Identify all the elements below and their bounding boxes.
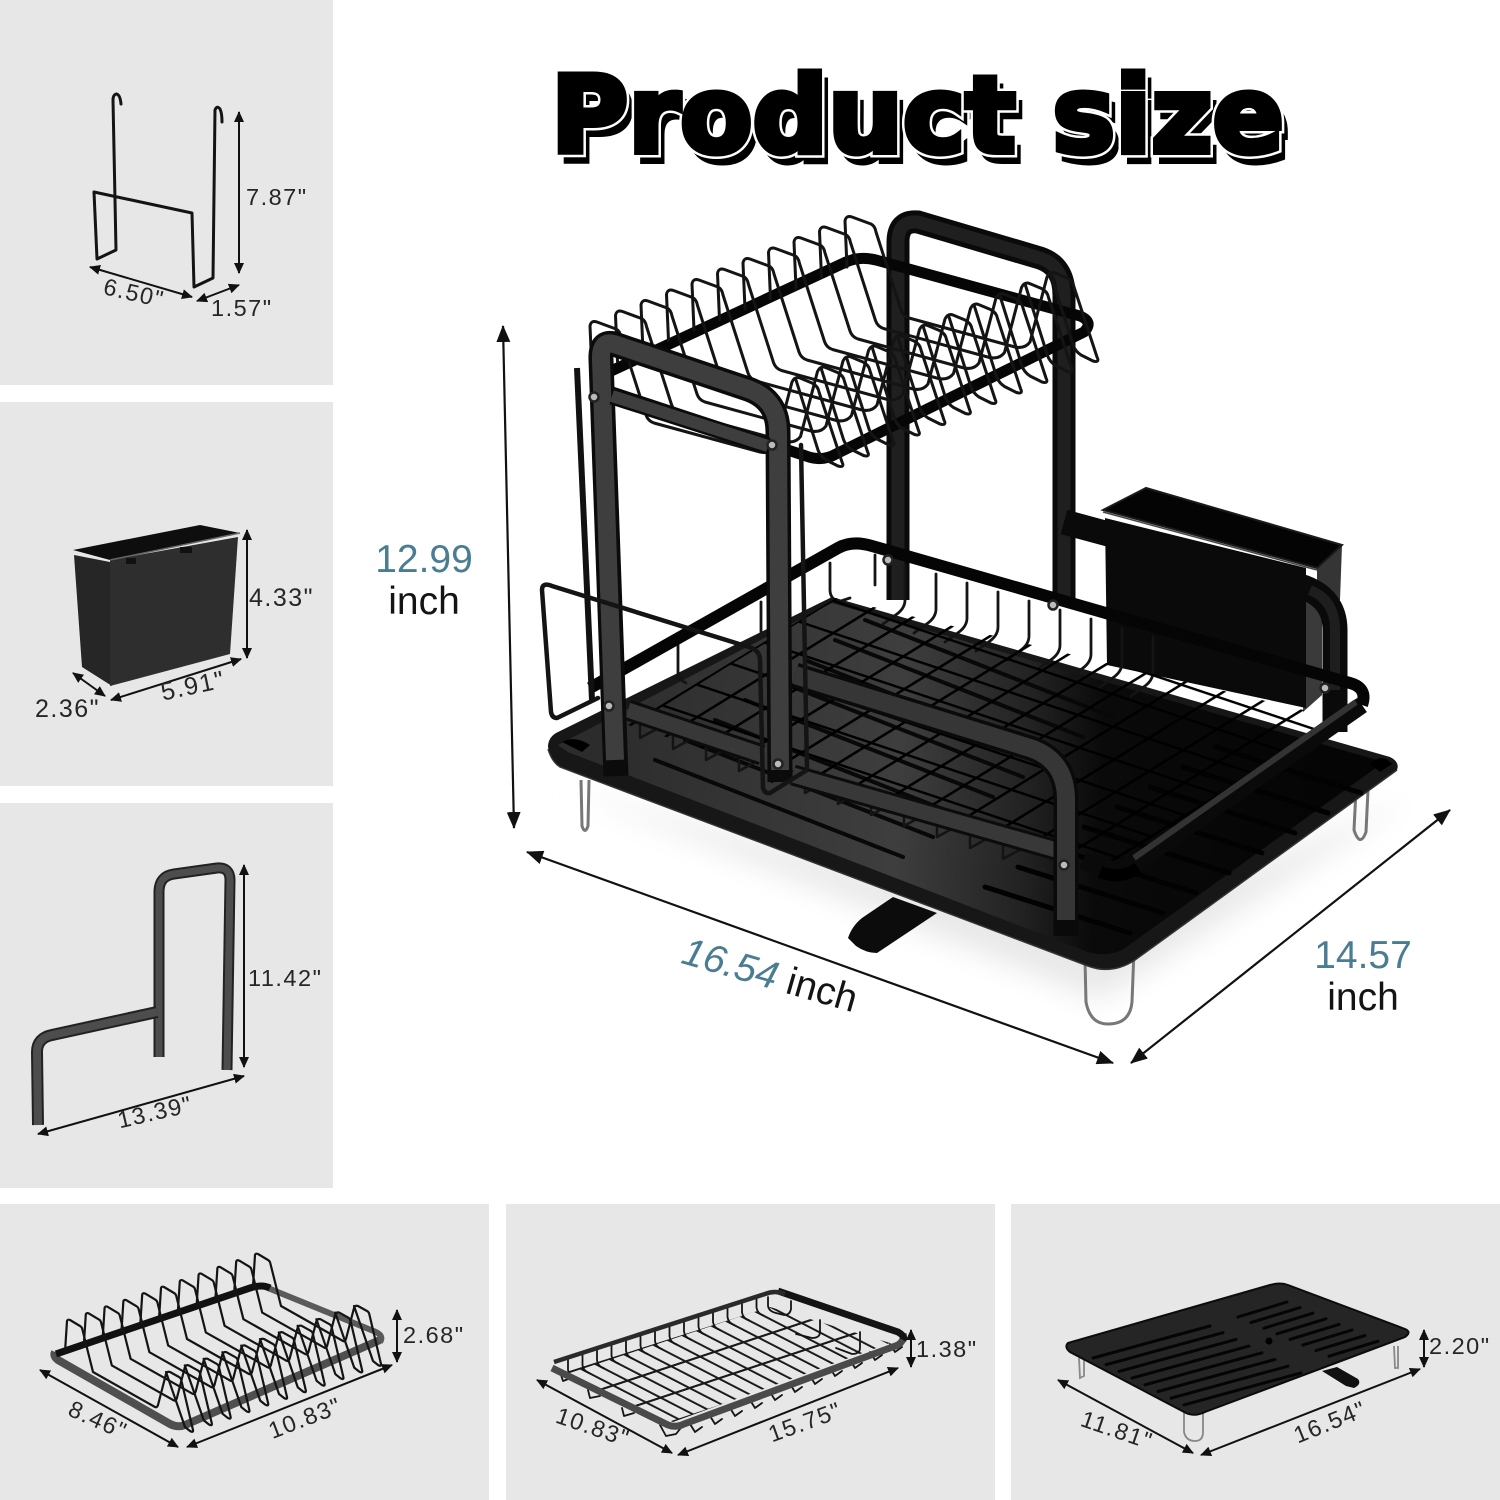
main product: two-tier dish rack [542,216,1410,1024]
label 10.83: 10.83" [265,1392,345,1444]
lower rack hanging wires [640,724,1023,859]
panel: lower wire rack part [506,1204,995,1500]
panel: wire holder part [0,0,333,385]
height label 12.99 inch: 12.99 [375,538,473,581]
panel: drip tray part [1011,1204,1500,1500]
panel: side frame part [0,803,333,1188]
label 4.33: 4.33" [249,584,314,612]
arrow 10.83 [187,1365,392,1447]
height arrow 11.42 [243,865,245,1067]
width label 14.57 inch: 14.57 [1314,934,1412,977]
height label 12.99 inch: inch [388,580,460,623]
arrow 15.75 [678,1368,898,1455]
floor shadow [570,790,1410,1000]
height arrow [503,326,514,828]
height label 12.99 inch [375,538,473,623]
label 13.39: 13.39" [115,1091,195,1133]
upper rack dividers [65,1254,381,1432]
stainless legs [581,780,1368,1024]
title: Product size [557,63,1290,186]
width arrow 5.91 [111,659,241,700]
drip tray [548,597,1398,969]
tray body [1066,1284,1408,1415]
title: Product size [551,54,1284,177]
lower rack frame [590,543,1364,875]
side frame drawing [37,868,230,1125]
label 1.57: 1.57" [211,295,273,321]
height arrow 4.33 [246,530,248,658]
drip tray spout [848,897,937,953]
depth arrow 1.57 [197,285,239,301]
label 2.68: 2.68" [403,1322,465,1348]
panel: utensil bin part [0,402,333,786]
height arrow 2.68 [396,1310,398,1362]
label 5.91: 5.91" [158,666,228,706]
height arrow 1.38 [910,1330,912,1367]
depth arrow 2.36 [73,673,105,696]
upper rack frame [54,1286,381,1426]
cutting board wire holder [542,445,807,793]
height arrow 2.20 [1423,1330,1425,1367]
label 8.46: 8.46" [65,1396,131,1444]
width arrow [1131,810,1450,1063]
lower rack frame [552,1291,903,1426]
label 11.42: 11.42" [248,965,322,991]
top rack dividers [590,216,1098,466]
label 2.20: 2.20" [1429,1333,1491,1359]
lower rack wire grid [628,598,1345,870]
arrow 11.81 [1058,1380,1193,1453]
label 6.50: 6.50" [101,273,167,313]
width label 14.57 inch [1314,934,1412,1019]
bin drawing [73,525,240,686]
label 1.38: 1.38" [916,1336,978,1362]
back tall frame [898,222,1064,600]
label 10.83: 10.83" [553,1402,633,1452]
tray drain hole [1266,1338,1272,1344]
width arrow 13.39 [38,1076,244,1134]
tray handle [1322,1367,1359,1388]
wire holder drawing [94,94,222,287]
tray slots [1093,1302,1378,1405]
label 11.81: 11.81" [1078,1406,1156,1454]
front tall frame and low frame [577,343,1066,936]
lower rack grid [563,1307,890,1422]
top rack frame [596,258,1088,459]
width arrow 6.50 [90,267,192,297]
arrow 10.83 [537,1380,672,1453]
height arrow 7.87 [238,112,240,273]
label 2.36: 2.36" [35,695,100,723]
label 16.54: 16.54" [1290,1396,1370,1448]
length label 16.54 inch: 16.54 inch [677,930,862,1021]
label 15.75: 15.75" [765,1397,845,1447]
lower rack hanging wires and hooks [560,1296,902,1436]
arrow 8.46 [40,1370,178,1447]
bolts [590,392,1330,870]
utensil holder [1103,488,1342,712]
back low frame [1064,522,1335,732]
length arrow [527,852,1113,1063]
panel: upper plate rack part [0,1204,489,1500]
arrow 16.54 [1201,1369,1420,1455]
label 7.87: 7.87" [246,184,308,210]
title: Product size [551,54,1284,177]
lower rack back wires [678,555,1153,696]
width label 14.57 inch: inch [1327,976,1399,1019]
tray legs [1079,1346,1398,1441]
